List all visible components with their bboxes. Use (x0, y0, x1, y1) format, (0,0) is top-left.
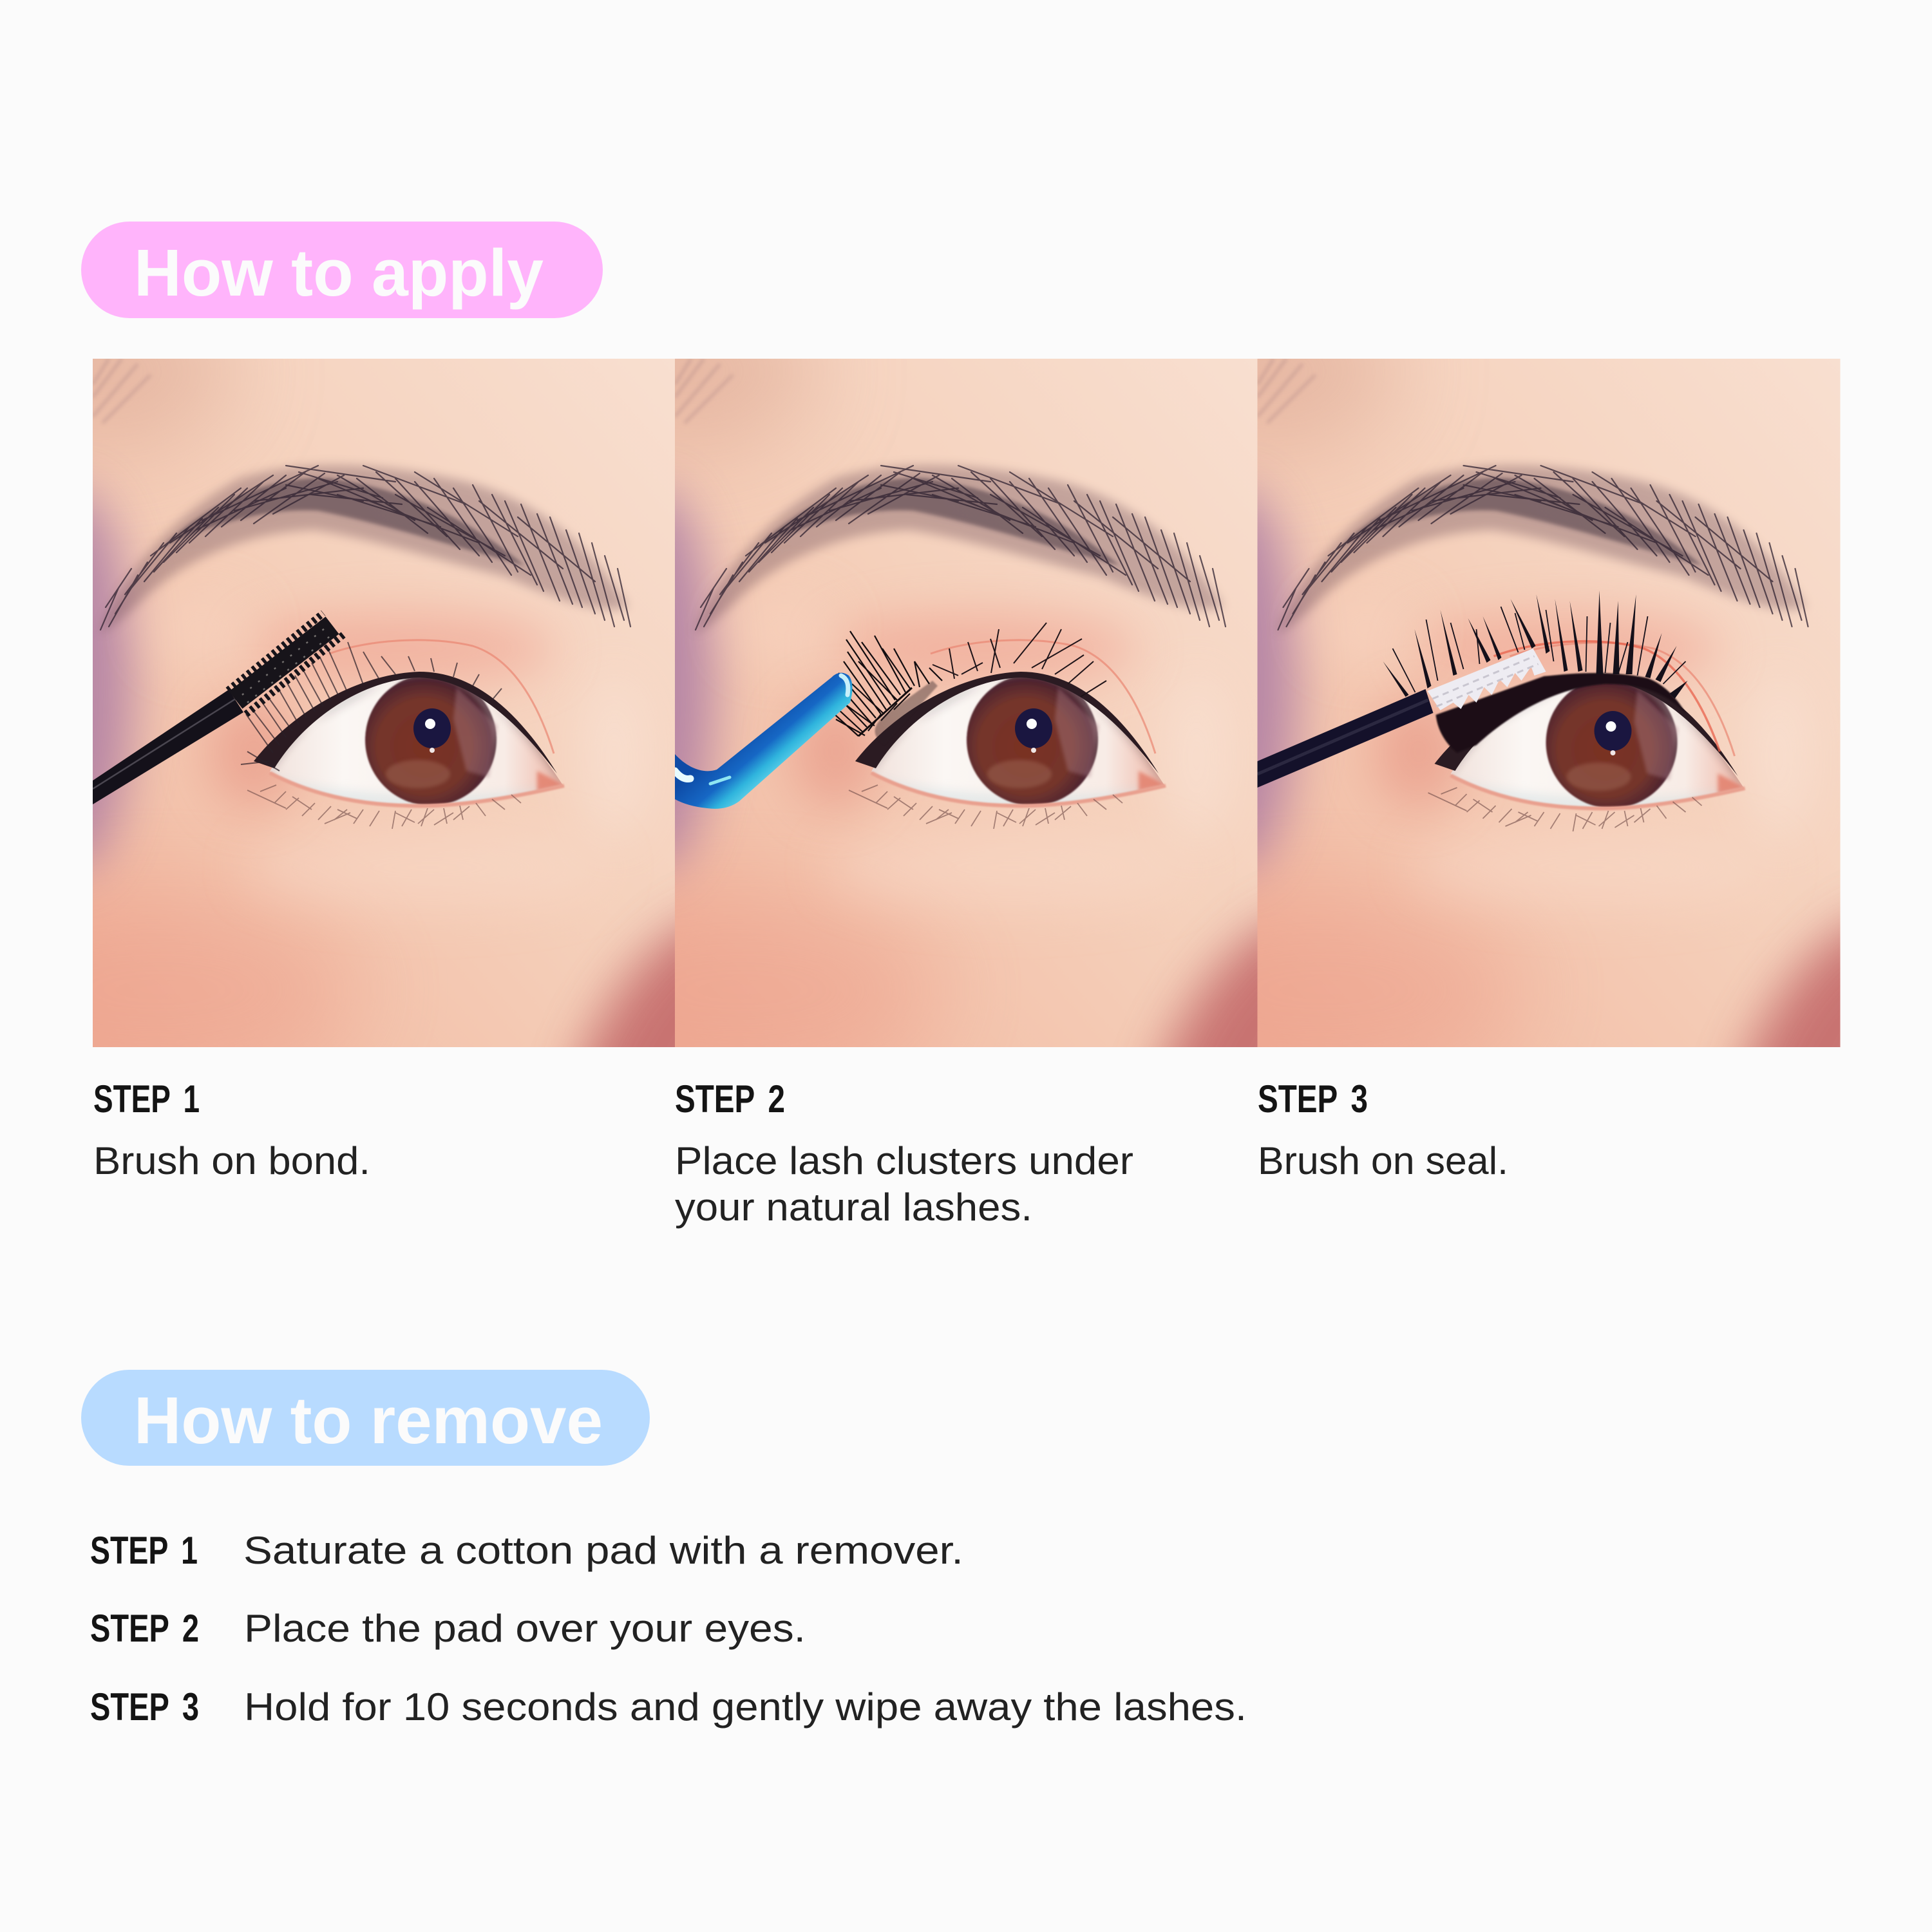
mascara wand (93, 613, 344, 804)
lash band and long lashes (1257, 591, 1687, 788)
removal step 2: STEP 2 (90, 1607, 199, 1650)
removal step 1: STEP 1 (90, 1529, 198, 1572)
removal step 3: Hold for 10 seconds and gently wipe away the lashes. (244, 1685, 1247, 1728)
step 2 caption: your natural lashes. (675, 1186, 1032, 1229)
step 3 caption: STEP 3 (1258, 1077, 1368, 1121)
heading: how to apply: How to apply (134, 236, 544, 310)
step 1 caption: STEP 1 (93, 1077, 200, 1121)
removal step 3: STEP 3 (90, 1685, 199, 1728)
heading: how to apply (81, 222, 603, 318)
lash cluster (828, 631, 942, 745)
tweezers (675, 673, 853, 809)
panel: step 3 photo, white wand brushing on seal (1257, 359, 1841, 1047)
step 3 caption: Brush on seal. (1258, 1139, 1508, 1182)
step 1 caption: Brush on bond. (93, 1139, 370, 1182)
panel: step 1 photo, mascara wand brushing on bond (93, 359, 675, 1047)
heading: how to remove (81, 1370, 650, 1466)
step 2 caption: STEP 2 (675, 1077, 785, 1121)
white brush head (1427, 649, 1546, 710)
step 3 caption (1258, 1077, 1508, 1182)
step 2 caption (675, 1077, 1133, 1229)
removal steps list (90, 1529, 1247, 1728)
heading: how to remove: How to remove (134, 1383, 603, 1457)
removal step 1: Saturate a cotton pad with a remover. (243, 1529, 963, 1572)
step 2 caption: Place lash clusters under (675, 1139, 1133, 1182)
step 1 caption (93, 1077, 370, 1182)
removal step 2: Place the pad over your eyes. (244, 1607, 806, 1650)
panel: step 2 photo, tweezers placing lash cluster (675, 359, 1257, 1047)
